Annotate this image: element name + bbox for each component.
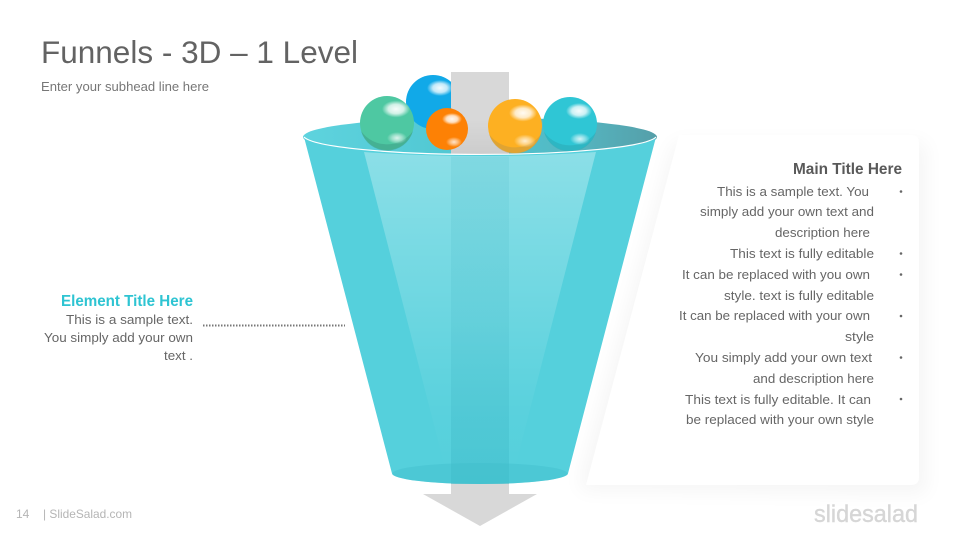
panel card [586, 135, 919, 485]
element text [44, 313, 193, 363]
panel body text: description here [775, 226, 870, 240]
gray arrow through funnel [423, 72, 537, 526]
funnel cone [304, 137, 656, 484]
ball: green [360, 96, 414, 151]
panel body text: style [845, 330, 874, 344]
panel body text: This is a sample text. You [717, 185, 869, 199]
panel body text: You simply add your own text [695, 351, 873, 365]
element title: Element Title Here [61, 293, 193, 310]
page number: 14 [16, 507, 30, 521]
dotted leader line [203, 324, 345, 326]
panel heading: Main Title Here [793, 161, 902, 178]
panel body text: simply add your own text and [700, 205, 874, 219]
funnel rim interior [303, 118, 657, 156]
footer [16, 507, 132, 521]
panel body text: and description here [753, 372, 874, 386]
element text: text . [164, 349, 193, 363]
panel body text: It can be replaced with your own [679, 309, 870, 323]
funnel body [304, 137, 656, 484]
logo: slidesalad [814, 501, 918, 528]
balls [360, 96, 597, 154]
panel body text: It can be replaced with you own [682, 268, 870, 282]
funnel base ellipse [392, 463, 568, 484]
panel body text: style. text is fully editable [724, 289, 874, 303]
panel body text: This text is fully editable [730, 247, 874, 261]
footer label: | SlideSalad.com [43, 507, 132, 521]
element text: This is a sample text. [66, 313, 193, 327]
panel body text: This text is fully editable. It can [685, 393, 871, 407]
element callout [44, 293, 345, 363]
inner light reflection [364, 152, 596, 472]
panel: main text [578, 135, 926, 494]
ball: blue [406, 75, 460, 129]
title: Funnels - 3D – 1 Level [41, 34, 358, 70]
funnel rim highlight [304, 137, 656, 154]
ball: orange [426, 108, 468, 150]
ball: teal [543, 97, 597, 152]
panel shadow [578, 142, 926, 494]
panel body text [679, 185, 874, 427]
ball: yellow [488, 99, 542, 154]
bullets [900, 190, 902, 400]
subtitle: Enter your subhead line here [41, 80, 209, 94]
panel body text: be replaced with your own style [686, 413, 874, 427]
arrow shade in cone [451, 156, 509, 484]
element text: You simply add your own [44, 331, 193, 345]
